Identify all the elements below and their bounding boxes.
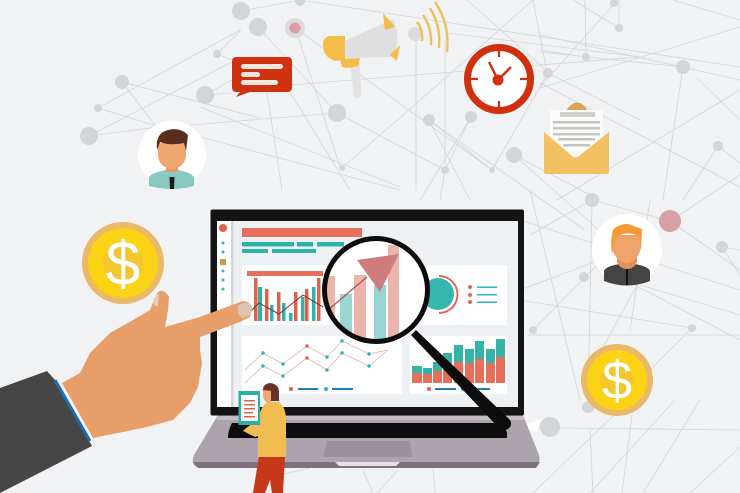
laptop: [193, 210, 540, 468]
pointing hand: [0, 291, 252, 493]
hand: [62, 291, 252, 438]
icon: chat bubble: [232, 57, 292, 97]
suit sleeve: [0, 371, 92, 493]
icon: dollar coin left: $: [106, 230, 140, 299]
dashboard heading bars: [242, 228, 362, 253]
panel: stacked bar chart: [410, 336, 507, 394]
thumb nail: [153, 293, 159, 306]
pink node right: [659, 210, 681, 232]
icon: dollar coin right: $: [602, 351, 632, 411]
dashboard sidebar: [219, 224, 227, 290]
avatar: man with tie: [138, 121, 206, 189]
icon: envelope: [544, 102, 609, 174]
network nodes: [80, 0, 728, 437]
icon: megaphone: [323, 2, 448, 98]
icon: dollar coin left: [82, 222, 164, 304]
blue shirt cuff: [55, 380, 90, 441]
laptop base: [193, 415, 540, 468]
icon: clock: [468, 48, 530, 110]
panel: bar chart and donut: [242, 265, 507, 325]
panel: line chart: [242, 336, 402, 394]
laptop bezel and screen: [210, 210, 524, 416]
icon: dollar coin right: [581, 344, 653, 416]
magnifying glass: [324, 238, 511, 430]
white arrow tip: [519, 419, 541, 432]
pink node top: [285, 18, 305, 38]
magnified chart: [325, 245, 399, 345]
avatar: man with orange hair: [592, 214, 662, 286]
finger nail: [238, 303, 252, 318]
person with tablet: [238, 383, 286, 493]
